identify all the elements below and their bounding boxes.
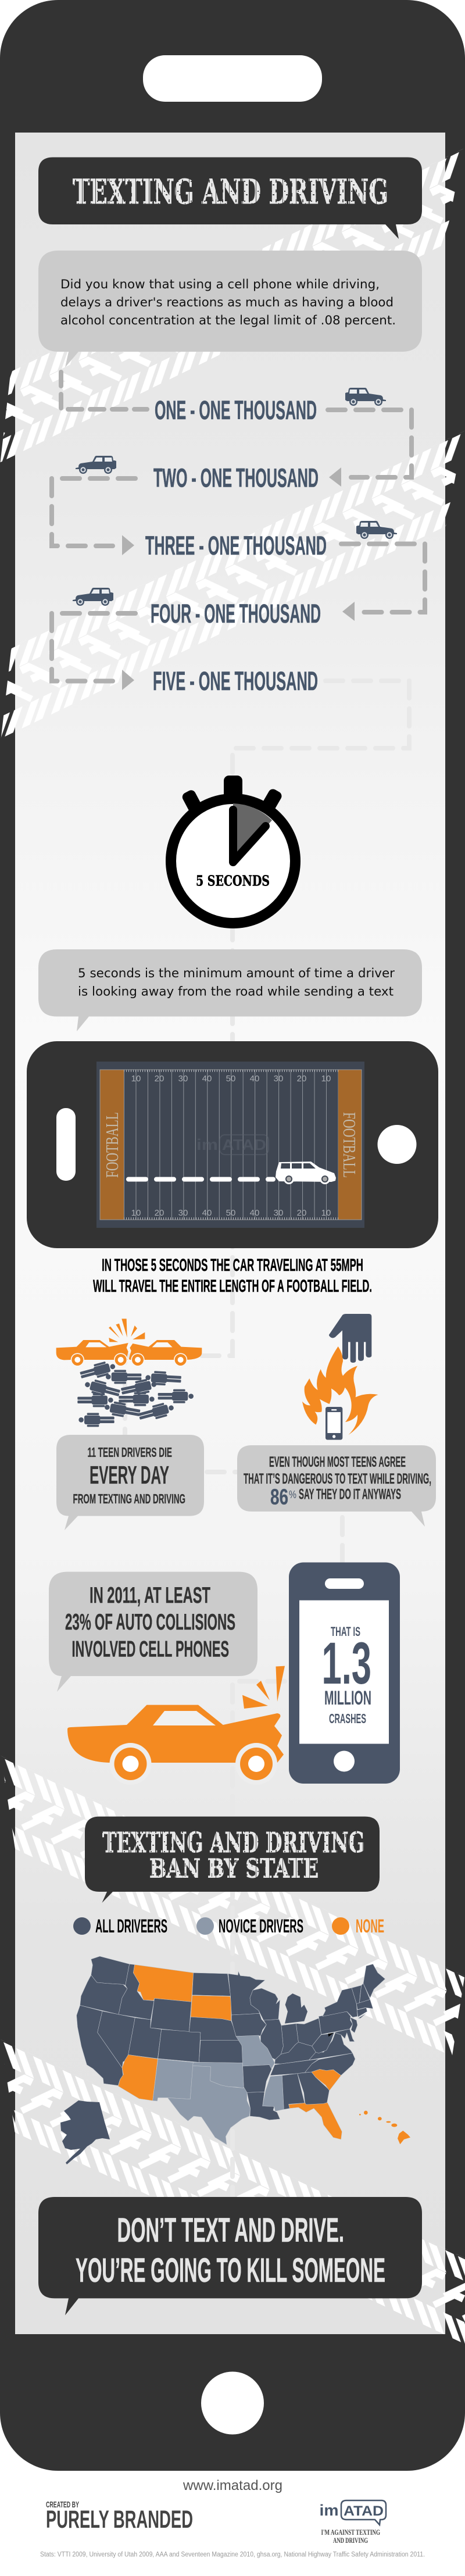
icon: pile of crash victims: [77, 1359, 194, 1427]
map legend: ALL DRIVEERS: [95, 1916, 167, 1937]
Alaska: [60, 2100, 110, 2164]
count text: [145, 395, 327, 696]
collisions bubble: [49, 1572, 257, 1692]
ban by state heading: TEXTING AND DRIVING: [102, 1827, 365, 1859]
closing message: [76, 2211, 385, 2289]
collisions text: [65, 1583, 235, 1662]
collisions text: 23% OF AUTO COLLISIONS: [65, 1610, 235, 1635]
map legend: NOVICE DRIVERS: [219, 1916, 303, 1937]
teens agree bubble: [237, 1445, 436, 1527]
ban by state heading: [102, 1827, 365, 1884]
icon: jeep 3: [356, 521, 397, 539]
yard numbers: 40: [250, 1208, 259, 1218]
icon: jeep 2: [76, 456, 116, 474]
intro bubble: [38, 251, 422, 367]
website address: www.imatad.org: [183, 2478, 282, 2493]
route: dark dashed path through the count: [52, 372, 425, 681]
yard numbers: 50: [226, 1074, 235, 1084]
intro text: Did you know that using a cell phone while driving,: [60, 277, 380, 291]
5 seconds text: 5 seconds is the minimum amount of time a driver: [78, 966, 395, 980]
map legend: NONE: [356, 1916, 384, 1937]
teen deaths text: FROM TEXTING AND DRIVING: [73, 1491, 185, 1506]
teen deaths bubble: [56, 1435, 204, 1530]
yard numbers: 40: [250, 1074, 259, 1084]
phone screen text: [322, 1624, 371, 1726]
stopwatch label: 5 SECONDS: [196, 872, 270, 889]
credit: Purely Branded: CREATED BY: [46, 2500, 79, 2510]
phone screen text: CRASHES: [329, 1711, 366, 1726]
end zone labels: [102, 1112, 360, 1178]
ban by state bubble: [85, 1817, 380, 1903]
end zone labels: FOOTBALL: [339, 1112, 360, 1178]
yard numbers: [131, 1074, 331, 1218]
yard numbers: 30: [274, 1074, 283, 1084]
icon: jeep 4: [73, 588, 113, 606]
car trail: [128, 1177, 273, 1181]
phone screen: [15, 133, 445, 2334]
yard numbers: 30: [274, 1208, 283, 1218]
icon: upright phone: [289, 1563, 400, 1784]
teen deaths text: 11 TEEN DRIVERS DIE: [87, 1445, 172, 1460]
Hawaii: [359, 2111, 410, 2144]
tire track 4: [0, 2032, 465, 2352]
collisions text: IN 2011, AT LEAST: [90, 1583, 210, 1608]
yard numbers: 10: [131, 1208, 141, 1218]
count text: FOUR - ONE THOUSAND: [151, 599, 321, 628]
yard numbers: 30: [178, 1208, 188, 1218]
title distress texture: [70, 177, 391, 206]
logo tagline: [321, 2528, 380, 2545]
map legend: [73, 1916, 384, 1937]
ban by state heading: BAN BY STATE: [149, 1853, 319, 1884]
yard numbers: 50: [226, 1208, 235, 1218]
phone screen text: MILLION: [324, 1687, 371, 1709]
football caption: [93, 1256, 372, 1296]
icon: stopwatch: [171, 776, 295, 923]
tire track 1: [0, 141, 465, 469]
collisions text: INVOLVED CELL PHONES: [72, 1637, 229, 1662]
5 seconds text: [78, 966, 395, 999]
icon: jeep 1: [345, 388, 386, 406]
yard numbers: 30: [178, 1074, 188, 1084]
closing bubble: [38, 2197, 422, 2315]
imATAD logo: [320, 2500, 386, 2545]
yard numbers: 20: [297, 1208, 306, 1218]
eastern states: [228, 1964, 410, 2144]
US map: [60, 1956, 410, 2164]
5 seconds bubble: [38, 949, 422, 1031]
yard numbers: 10: [321, 1208, 331, 1218]
imATAD logo: im: [320, 2502, 338, 2519]
western states: [77, 1956, 251, 2145]
football field: [96, 1062, 364, 1228]
yard numbers: 40: [202, 1074, 212, 1084]
teens agree text: %: [289, 1489, 296, 1500]
yard numbers: 10: [131, 1074, 141, 1084]
yard numbers: 20: [155, 1074, 164, 1084]
teens agree text: 86: [270, 1485, 288, 1509]
count text: THREE - ONE THOUSAND: [145, 531, 327, 560]
watermark logo: ATAD: [222, 1136, 266, 1153]
teen deaths text: [73, 1445, 185, 1506]
phone speaker slot: [143, 55, 322, 102]
icon: crashed car: [67, 1666, 285, 1785]
sources: Stats: VTTI 2009, University of Utah 2009, AAA and Seventeen Magazine 2010, ghsa.org, National Highway Traffic Safety Administration 2011.: [40, 2552, 425, 2559]
teen deaths text: EVERY DAY: [90, 1461, 169, 1489]
logo tagline: I'M AGAINST TEXTING: [321, 2528, 380, 2536]
yard numbers: 10: [321, 1074, 331, 1084]
intro text: alcohol concentration at the legal limit of .08 percent.: [60, 313, 396, 327]
teens agree text: [244, 1454, 431, 1509]
icon: white SUV: [276, 1162, 336, 1184]
icon: two cars colliding: [56, 1319, 202, 1367]
watermark logo: im: [196, 1136, 218, 1153]
5 seconds text: is looking away from the road while sending a text: [78, 985, 394, 999]
icon: hand, flames and phone: [302, 1314, 378, 1440]
count text: ONE - ONE THOUSAND: [155, 395, 317, 425]
count text: FIVE - ONE THOUSAND: [153, 666, 318, 696]
credit: Purely Branded: [46, 2500, 193, 2534]
title bubble: [38, 157, 422, 239]
end zone labels: FOOTBALL: [102, 1112, 122, 1178]
intro text: delays a driver's reactions as much as having a blood: [60, 295, 394, 309]
imATAD logo: ATAD: [344, 2503, 384, 2519]
phone screen text: THAT IS: [331, 1624, 360, 1639]
tire track 3: [0, 1749, 465, 2070]
logo tagline: AND DRIVING: [333, 2536, 368, 2545]
phone home button: [201, 2372, 264, 2435]
intro text: [60, 277, 396, 327]
tire track 2: [0, 424, 465, 746]
route arrowheads: [122, 467, 355, 690]
heading distress texture: [100, 1830, 367, 1880]
yard numbers: 20: [297, 1074, 306, 1084]
watermark logo: [196, 1135, 269, 1155]
landscape phone: [27, 1041, 438, 1248]
credit: Purely Branded: PURELY BRANDED: [46, 2506, 193, 2534]
yard numbers: 20: [155, 1208, 164, 1218]
count text: TWO - ONE THOUSAND: [153, 463, 319, 493]
yard numbers: 40: [202, 1208, 212, 1218]
route: light dashed path through the page: [125, 681, 409, 2198]
phone screen text: 1.3: [322, 1630, 371, 1696]
